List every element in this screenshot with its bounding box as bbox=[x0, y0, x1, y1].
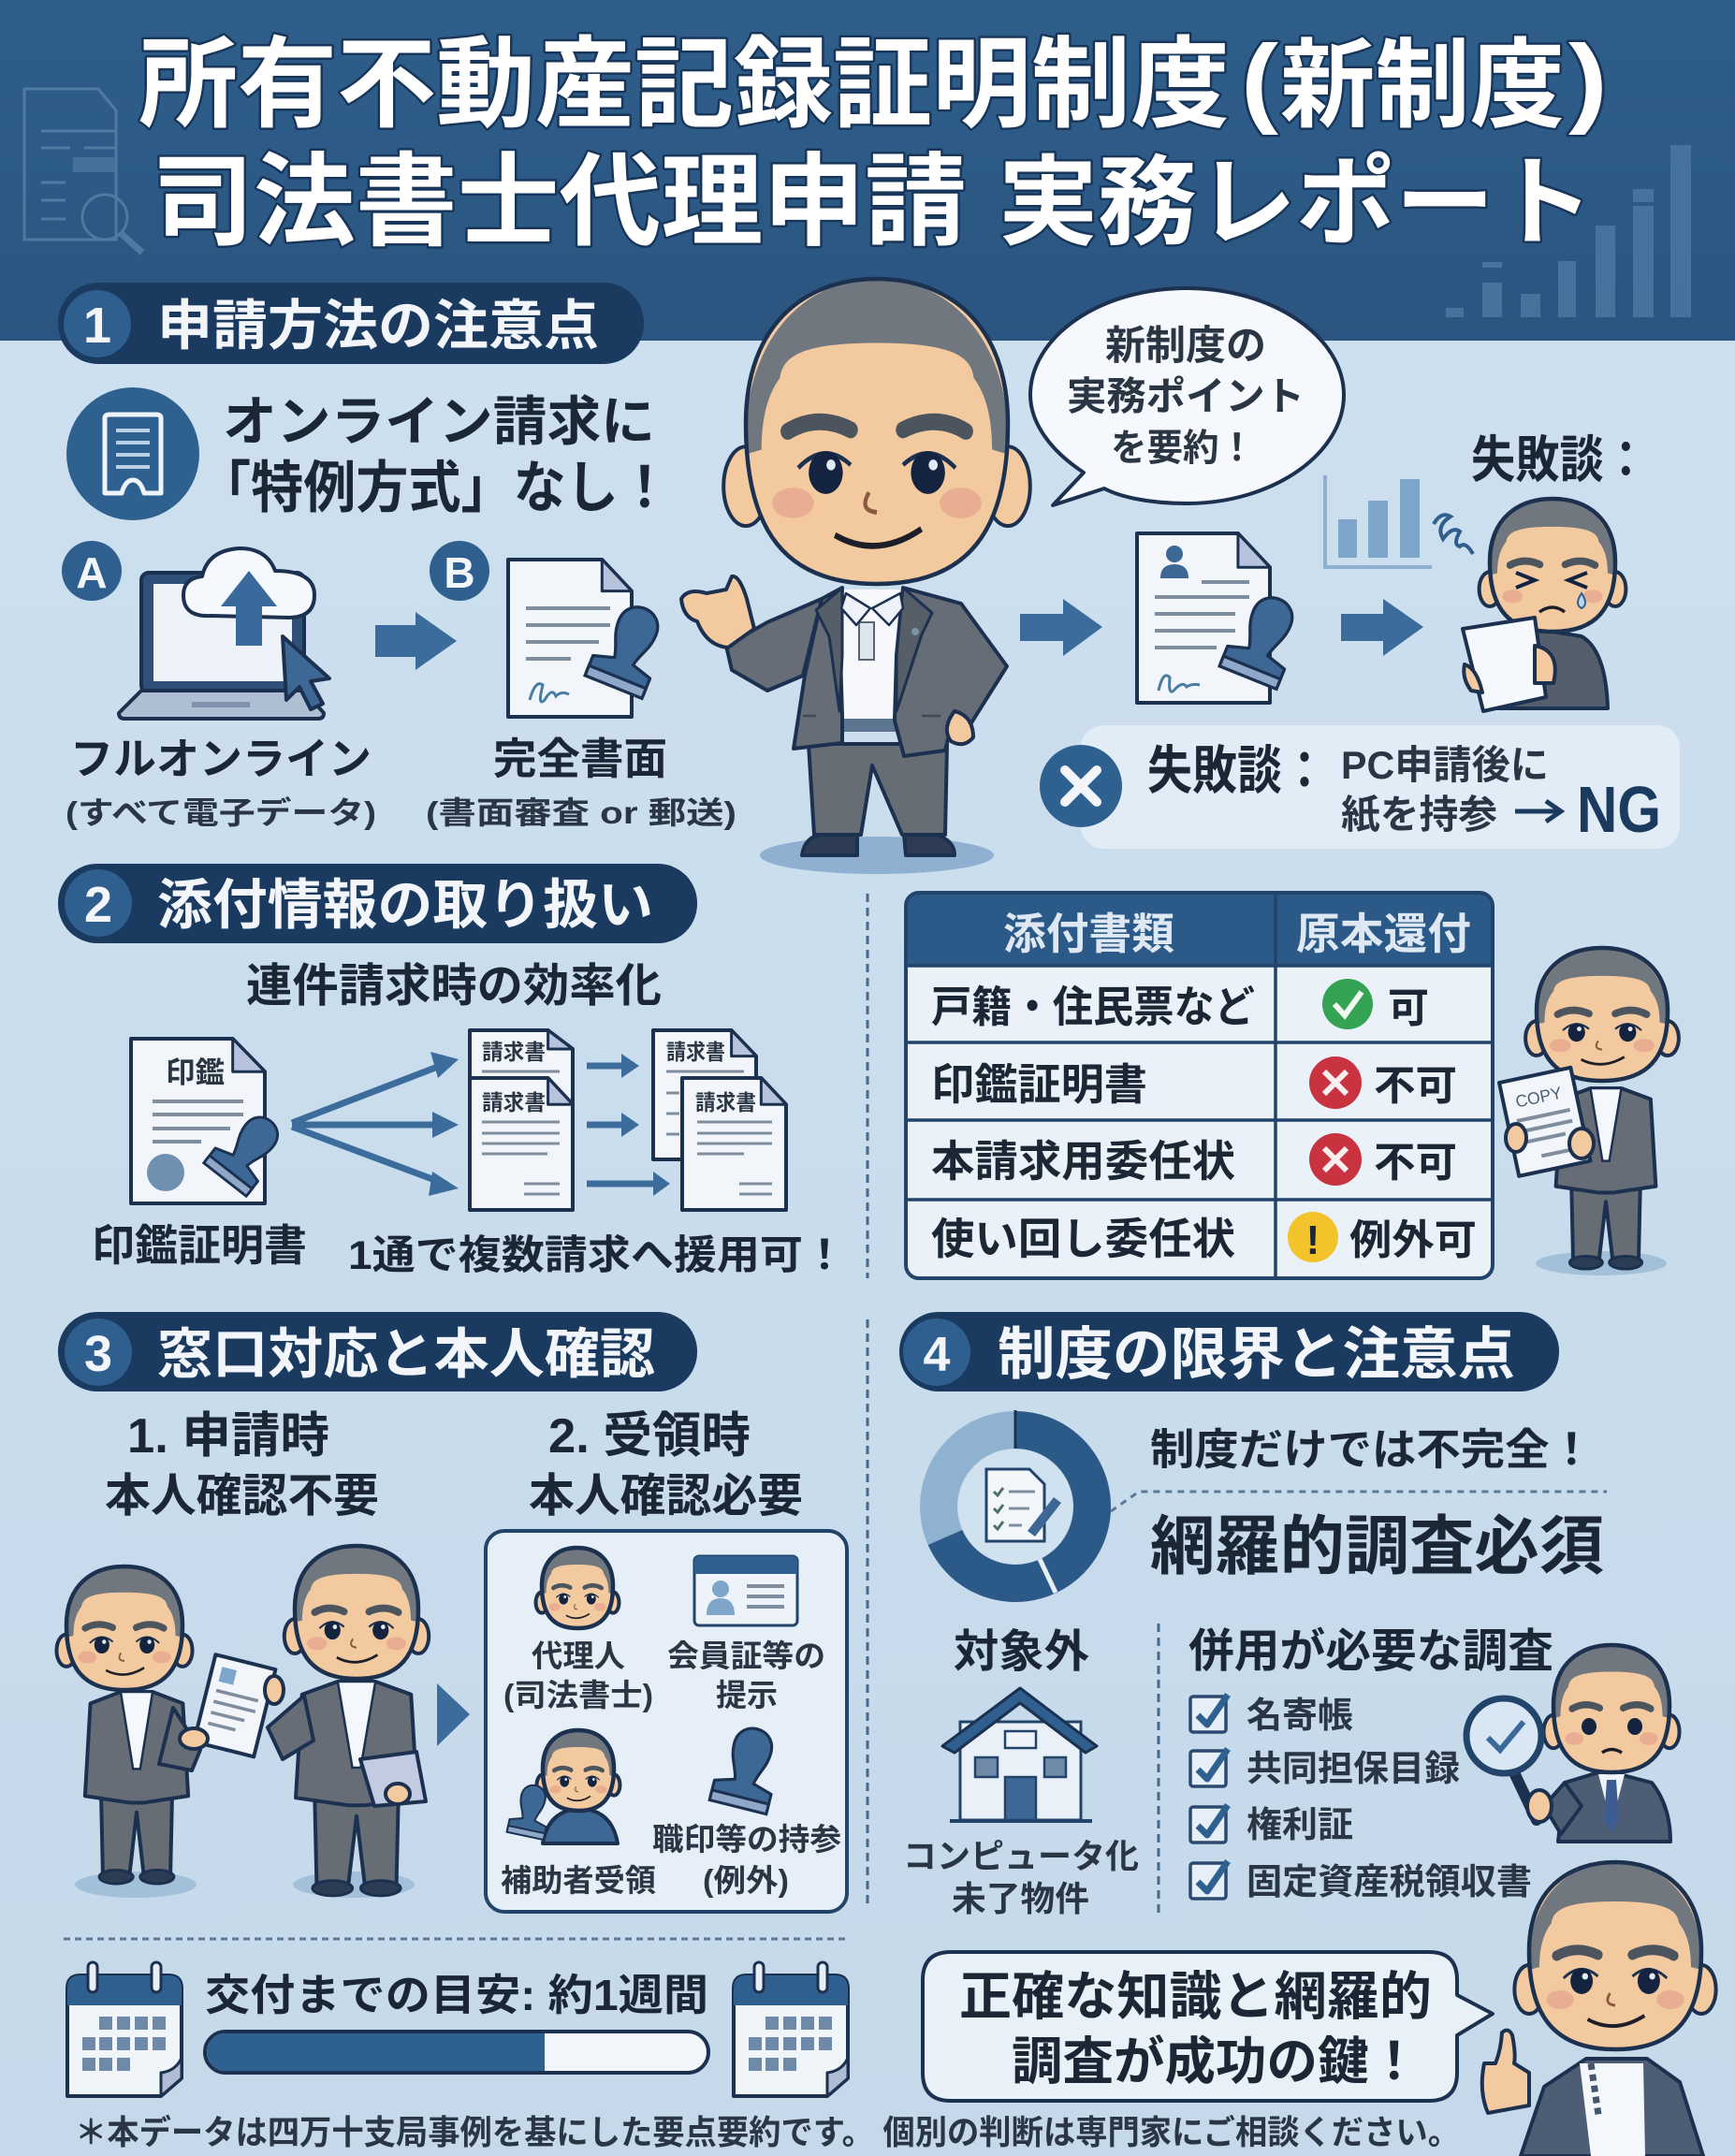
title: 司法書士代理申請 bbox=[152, 145, 967, 258]
label: not computerized bbox=[903, 1837, 1139, 1918]
assistant bbox=[507, 1730, 620, 1843]
copy character bbox=[1499, 948, 1679, 1275]
delivery estimate label: 交付までの目安: 約1週間 bbox=[205, 1971, 708, 2019]
checklist bbox=[1190, 1695, 1532, 1902]
item: fixed asset tax receipt: 固定資産税領収書 bbox=[1247, 1863, 1532, 1902]
label: seal certificate: 印鑑証明書 bbox=[92, 1221, 307, 1270]
row: family register bbox=[931, 979, 1429, 1031]
characters handing over document bbox=[56, 1546, 429, 1898]
row: reused power of attorney: 例外可 bbox=[1349, 1217, 1477, 1263]
table header bbox=[906, 893, 1493, 966]
label: member card: 提示 bbox=[716, 1678, 778, 1712]
panel: identity options bbox=[486, 1531, 847, 1912]
arrow bbox=[375, 612, 457, 670]
label: assistant pickup: 補助者受領 bbox=[501, 1863, 656, 1898]
item: name register: 名寄帳 bbox=[1247, 1697, 1353, 1736]
closing speech bubble: 正確な知識と網羅的 bbox=[959, 1967, 1432, 2026]
closing speech bubble bbox=[923, 1952, 1493, 2101]
speech bubble: practical points: 実務ポイント bbox=[1067, 374, 1305, 418]
icon: house bbox=[942, 1688, 1097, 1821]
section 4 heading: 制度の限界と注意点 bbox=[998, 1322, 1515, 1386]
main character bbox=[681, 279, 1030, 874]
closing speech bubble: 調査が成功の鍵！ bbox=[1012, 2032, 1420, 2090]
dashed connector bbox=[1111, 1492, 1607, 1511]
title: ) bbox=[1568, 25, 1608, 136]
header band bbox=[0, 0, 1735, 341]
icon: online document bbox=[66, 387, 199, 520]
stamp bbox=[709, 1722, 786, 1814]
vertical divider bbox=[1157, 1624, 1160, 1915]
item: title certificate: 権利証 bbox=[1247, 1806, 1353, 1845]
horizontal divider bbox=[64, 1937, 850, 1941]
section 4 heading bbox=[899, 1312, 1559, 1391]
label: official seal bbox=[652, 1822, 841, 1898]
section 2 heading bbox=[58, 864, 697, 943]
copy character: COPY bbox=[1514, 1084, 1564, 1112]
label: failure story: 失敗談： bbox=[1471, 432, 1648, 488]
row: family register: 可 bbox=[1388, 985, 1429, 1031]
final character bbox=[1482, 1862, 1716, 2156]
calendar right bbox=[734, 1962, 848, 2096]
label: official seal: (例外) bbox=[703, 1863, 789, 1898]
heading: parallel surveys: 併用が必要な調査 bbox=[1188, 1626, 1553, 1677]
row: seal certificate: 印鑑証明書 bbox=[931, 1060, 1147, 1109]
handed document bbox=[194, 1654, 275, 1756]
failure callout: PC申請後に bbox=[1341, 743, 1549, 787]
label: out of scope: 対象外 bbox=[954, 1627, 1089, 1677]
mini bar chart bbox=[1325, 475, 1432, 567]
failure character bbox=[1434, 499, 1626, 711]
speech bubble: practical points bbox=[1030, 288, 1344, 505]
row: seal certificate bbox=[931, 1056, 1457, 1109]
label: official seal: 職印等の持参 bbox=[652, 1822, 841, 1857]
section 3 heading: 3 bbox=[84, 1326, 112, 1382]
icon: paper document with stamp bbox=[508, 560, 674, 717]
text: comprehensive survey required: 網羅的調査必須 bbox=[1150, 1510, 1604, 1582]
item: title certificate bbox=[1190, 1805, 1353, 1845]
title: 所有不動産記録証明制度 bbox=[139, 30, 1230, 140]
icon: signed document with stamp bbox=[1137, 533, 1308, 703]
label: full paper: (書面審査 or 郵送) bbox=[426, 795, 736, 830]
document stack 2 bbox=[653, 1030, 786, 1210]
label: full paper bbox=[426, 735, 736, 830]
checklist icon bbox=[986, 1469, 1061, 1541]
speech bubble: practical points: を要約！ bbox=[1111, 428, 1255, 469]
title bbox=[139, 25, 1608, 258]
badge B bbox=[430, 541, 489, 601]
failure callout: NG bbox=[1577, 773, 1661, 846]
subheading: batch efficiency: 連件請求時の効率化 bbox=[246, 961, 662, 1012]
failure callout: 紙を持参 bbox=[1341, 793, 1497, 837]
table header: 原本還付 bbox=[1296, 910, 1471, 958]
agent head bbox=[536, 1548, 619, 1628]
icon: seal certificate bbox=[131, 1039, 292, 1203]
row: family register: 戸籍・住民票など bbox=[931, 983, 1255, 1031]
badge A: A bbox=[76, 548, 108, 597]
section 2 heading: 添付情報の取り扱い bbox=[157, 875, 653, 936]
row: power of attorney bbox=[931, 1133, 1457, 1186]
item: joint collateral list: 共同担保目録 bbox=[1247, 1750, 1460, 1789]
step 2 heading: 本人確認必要 bbox=[529, 1471, 803, 1522]
vertical divider bbox=[867, 894, 868, 1904]
item: name register bbox=[1190, 1695, 1353, 1736]
heading: no special method bbox=[198, 392, 671, 519]
magnifier character bbox=[1466, 1645, 1680, 1842]
label: full online: (すべて電子データ) bbox=[66, 795, 376, 830]
row: seal certificate: 不可 bbox=[1374, 1063, 1457, 1109]
progress bar bbox=[205, 2032, 708, 2073]
arrow bbox=[437, 1683, 470, 1746]
label: not computerized: コンピュータ化 bbox=[903, 1837, 1139, 1875]
table header: 添付書類 bbox=[1003, 910, 1174, 958]
ID card bbox=[694, 1556, 797, 1625]
label: agent: 代理人 bbox=[532, 1639, 625, 1673]
speech bubble: practical points: 新制度の bbox=[1105, 324, 1266, 369]
failure callout: 失敗談： bbox=[1147, 741, 1327, 800]
heading: no special method: 「特例方式」なし！ bbox=[198, 457, 671, 519]
badge A bbox=[62, 541, 122, 601]
step 1 heading bbox=[105, 1409, 379, 1522]
section 1 heading bbox=[58, 283, 644, 364]
label: full online: フルオンライン bbox=[70, 735, 372, 783]
row: reused power of attorney bbox=[931, 1212, 1477, 1263]
document stack 1: 請求書 bbox=[482, 1040, 546, 1064]
failure callout bbox=[1040, 725, 1680, 849]
step 1 heading: 本人確認不要 bbox=[105, 1471, 379, 1522]
document stack 2: 請求書 bbox=[666, 1040, 725, 1064]
table: original document return bbox=[906, 893, 1493, 1278]
row: power of attorney: 不可 bbox=[1374, 1140, 1457, 1186]
label: member card bbox=[667, 1639, 825, 1712]
title: ( bbox=[1241, 25, 1279, 136]
title: 実務レポート bbox=[999, 149, 1594, 258]
step 2 heading bbox=[529, 1409, 803, 1522]
icon: seal certificate: 印鑑 bbox=[166, 1056, 225, 1089]
section 4 heading: 4 bbox=[924, 1328, 951, 1382]
section 2 heading: 2 bbox=[84, 877, 112, 933]
label: full paper: 完全書面 bbox=[493, 735, 667, 783]
label: member card: 会員証等の bbox=[667, 1639, 825, 1673]
arrow bbox=[1020, 599, 1102, 656]
title: 新制度 bbox=[1280, 32, 1565, 140]
label: agent bbox=[503, 1639, 653, 1712]
label: agent: (司法書士) bbox=[503, 1678, 653, 1712]
donut chart bbox=[939, 1410, 1092, 1593]
step 1 heading: 1. 申請時 bbox=[127, 1409, 329, 1464]
row: reused power of attorney: 使い回し委任状 bbox=[931, 1215, 1235, 1263]
step 2 heading: 2. 受領時 bbox=[548, 1409, 751, 1464]
section 3 heading: 窓口対応と本人確認 bbox=[157, 1324, 655, 1385]
watermark: rising bars bbox=[1446, 145, 1691, 317]
footnote: ＊本データは四万十支局事例を基にした要点要約です。 個別の判断は専門家にご相談ください。 bbox=[75, 2113, 1460, 2151]
arrow bbox=[1341, 599, 1423, 656]
calendar left bbox=[67, 1962, 182, 2096]
heading: no special method: オンライン請求に bbox=[223, 392, 655, 452]
section 1 heading: 申請方法の注意点 bbox=[157, 296, 599, 357]
document stack 1: 請求書 bbox=[482, 1090, 546, 1114]
icon: laptop with cloud upload bbox=[119, 548, 329, 719]
held folder bbox=[360, 1752, 426, 1806]
arrows: to next documents bbox=[587, 1054, 670, 1196]
section 3 heading bbox=[58, 1312, 697, 1391]
badge B: B bbox=[444, 548, 475, 597]
label: reuse note: 1通で複数請求へ援用可！ bbox=[348, 1233, 846, 1278]
row: reused power of attorney: ! bbox=[1306, 1217, 1319, 1263]
watermark: document and magnifier bbox=[24, 89, 142, 253]
text: system alone is incomplete: 制度だけでは不完全！ bbox=[1150, 1425, 1594, 1474]
document stack 1 bbox=[470, 1030, 573, 1210]
document stack 2: 請求書 bbox=[695, 1090, 756, 1114]
label: full online bbox=[66, 735, 376, 830]
section 1 heading: 1 bbox=[83, 298, 111, 354]
arrows: one to many bbox=[292, 1052, 459, 1196]
label: not computerized: 未了物件 bbox=[952, 1880, 1089, 1918]
row: power of attorney: 本請求用委任状 bbox=[931, 1137, 1235, 1186]
